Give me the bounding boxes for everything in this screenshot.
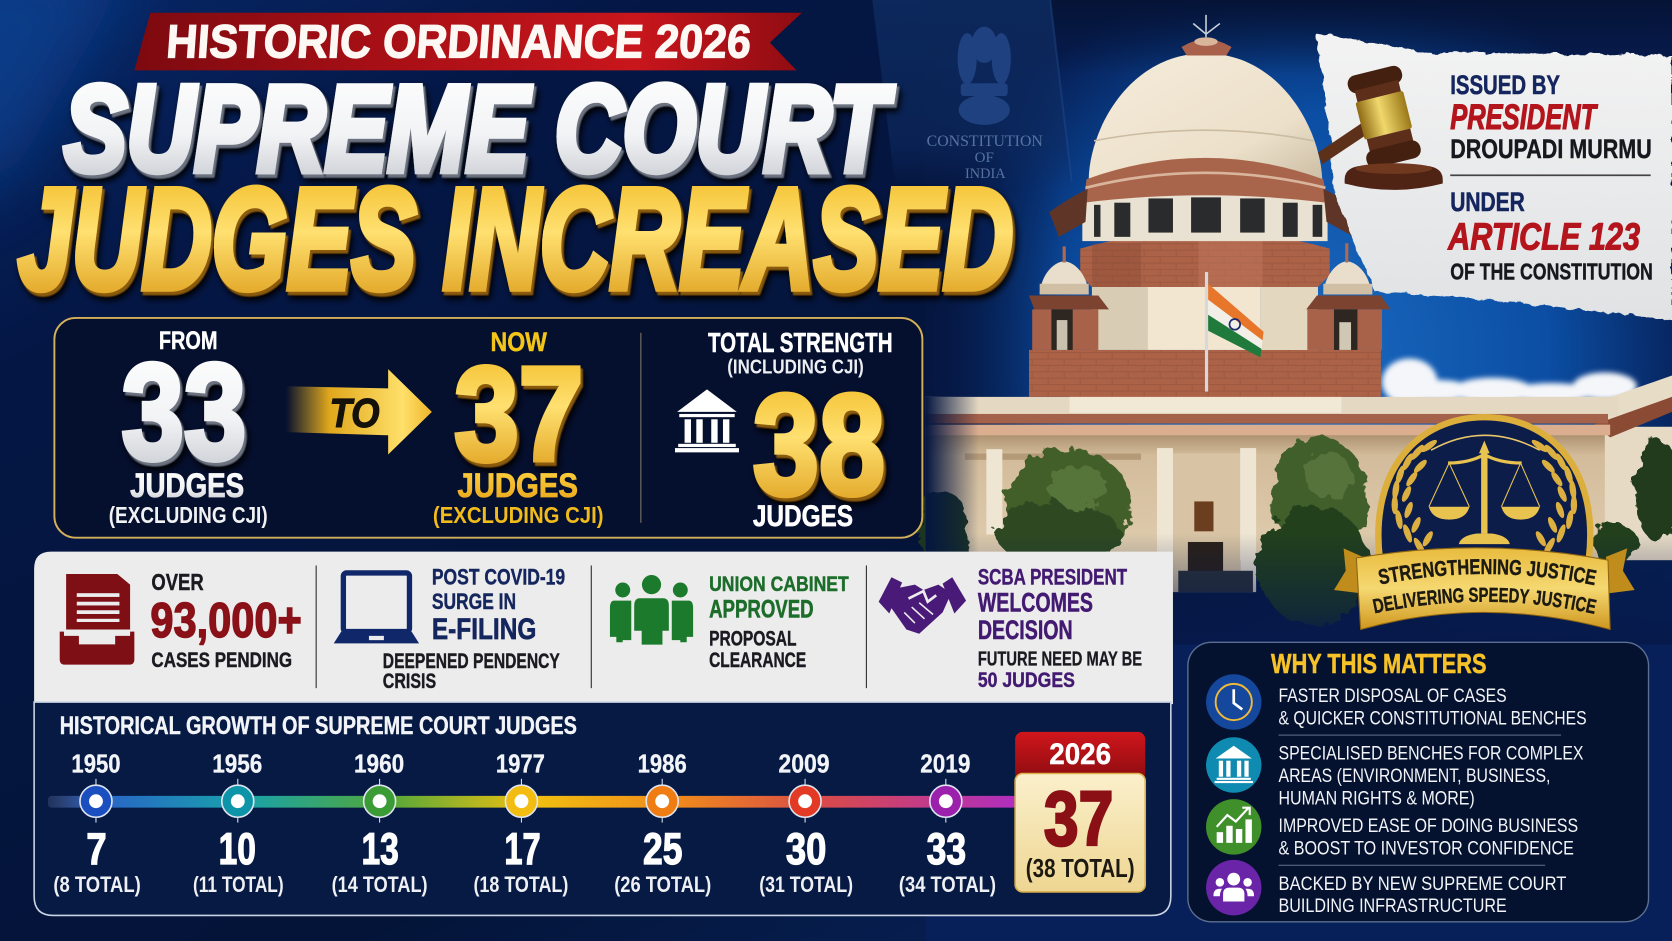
milestone 1986: 25 — [643, 824, 682, 874]
now 37 — [433, 327, 604, 528]
milestone 2026 highlight: (38 TOTAL) — [1026, 855, 1135, 883]
now 37: JUDGES — [457, 467, 578, 505]
panel: judge count — [54, 318, 922, 538]
from 33: 33 — [122, 335, 246, 488]
laurel wreath — [1391, 438, 1577, 556]
milestone 1956 — [193, 750, 284, 897]
headline banner: HISTORIC ORDINANCE 2026 — [165, 15, 753, 68]
torn paper note — [1316, 33, 1672, 320]
left small dome — [1040, 246, 1089, 294]
milestone 1950: (8 TOTAL) — [53, 872, 141, 897]
ribbon: DELIVERING SPEEDY JUSTICE — [1372, 587, 1597, 614]
icon: handshake — [879, 577, 966, 634]
fact: cabinet: APPROVED — [709, 597, 814, 624]
cream tower — [1092, 280, 1147, 350]
note text: ISSUED BY — [1450, 70, 1560, 100]
milestone 1977: (18 TOTAL) — [473, 872, 568, 897]
total strength — [675, 327, 893, 533]
milestone 1950 — [53, 750, 141, 897]
icon: people — [610, 575, 693, 645]
milestone 1977: 1977 — [496, 750, 545, 778]
item: new building: BUILDING INFRASTRUCTURE — [1279, 896, 1507, 917]
supreme court building — [918, 15, 1672, 648]
icon: courthouse — [675, 389, 739, 452]
fact: e-filing: POST COVID-19 — [432, 565, 565, 590]
roof bands — [926, 397, 1619, 416]
total strength: 38 — [753, 366, 885, 525]
right small dome — [1323, 243, 1372, 294]
book title: INDIA — [965, 166, 1006, 182]
from 33: FROM — [159, 328, 218, 355]
panel: key facts — [34, 552, 1173, 704]
fact: cases pending: 93,000+ — [150, 594, 302, 648]
icon: growth chart — [1206, 799, 1261, 855]
scales of justice — [1429, 441, 1540, 544]
total strength: JUDGES — [753, 500, 853, 533]
lower building wall — [926, 432, 1672, 560]
panel: why this matters — [1188, 642, 1649, 922]
fact: scba: DECISION — [978, 615, 1073, 645]
fact: scba: SCBA PRESIDENT — [978, 565, 1127, 590]
item: specialised benches: AREAS (ENVIRONMENT, BUSINESS, — [1279, 766, 1550, 787]
milestone 1956: 1956 — [212, 750, 262, 778]
milestone 2026 highlight — [1015, 732, 1145, 892]
ribbon — [1334, 547, 1635, 630]
milestone 2009: 2009 — [778, 750, 830, 778]
timeline heading: HISTORICAL GROWTH OF SUPREME COURT JUDGES — [60, 713, 577, 740]
title: judges increased: JUDGES INCREASED — [18, 160, 1013, 319]
brick drum — [1080, 231, 1330, 287]
arrow — [286, 369, 432, 454]
fact: scba: 50 JUDGES — [978, 668, 1075, 692]
base of tower — [1029, 350, 1381, 397]
milestone 2009: (31 TOTAL) — [759, 872, 853, 897]
item: faster disposal: FASTER DISPOSAL OF CASES — [1279, 686, 1507, 707]
fact: cases pending — [60, 569, 302, 672]
dome band — [1083, 158, 1328, 203]
gavel — [1318, 64, 1443, 190]
milestone 2019 — [899, 750, 996, 897]
book title: OF — [975, 150, 994, 166]
fact: cabinet: PROPOSAL — [709, 626, 797, 650]
item: faster disposal: & QUICKER CONSTITUTIONAL BENCHES — [1279, 708, 1587, 729]
ribbon: STRENGTHENING JUSTICE — [1378, 559, 1597, 586]
milestone 1950: 7 — [86, 824, 107, 874]
book title: CONSTITUTION — [927, 133, 1043, 150]
milestone 1956: (11 TOTAL) — [193, 872, 284, 897]
emblem — [958, 27, 1011, 125]
milestone 1960 — [332, 750, 428, 897]
item: new building — [1206, 860, 1567, 917]
timeline bar — [48, 796, 1016, 808]
milestone 1956: 10 — [219, 824, 256, 874]
clouds — [1382, 358, 1637, 405]
item: specialised benches: SPECIALISED BENCHES FOR COMPLEX — [1279, 744, 1584, 765]
now 37: NOW — [491, 327, 548, 357]
milestone 1960: 1960 — [354, 750, 404, 778]
fact: scba: FUTURE NEED MAY BE — [978, 649, 1142, 671]
arrow: TO — [329, 390, 380, 436]
title: supreme court: SUPREME COURT — [64, 61, 894, 197]
right pavilion — [1306, 296, 1390, 350]
item: specialised benches: HUMAN RIGHTS & MORE) — [1279, 788, 1475, 809]
why heading: WHY THIS MATTERS — [1271, 648, 1486, 679]
fact: e-filing: E-FILING — [432, 613, 536, 646]
item: new building: BACKED BY NEW SUPREME COURT — [1279, 874, 1567, 895]
fact: e-filing: DEEPENED PENDENCY — [383, 649, 560, 673]
icon: group — [1206, 860, 1261, 915]
now 37: 37 — [454, 340, 583, 489]
fact: cases pending: OVER — [151, 569, 204, 595]
fact: cabinet: UNION CABINET — [709, 572, 849, 596]
fact: cases pending: CASES PENDING — [151, 648, 292, 672]
fact: cabinet: CLEARANCE — [709, 648, 806, 672]
milestone 2019: 2019 — [920, 750, 970, 778]
milestone 1960: (14 TOTAL) — [332, 872, 428, 897]
book title — [927, 133, 1043, 182]
drum windows — [1082, 192, 1328, 241]
milestone 2009 — [759, 750, 853, 897]
icon: clock — [1206, 674, 1261, 730]
from 33: JUDGES — [130, 467, 244, 505]
fact: e-filing: CRISIS — [383, 669, 436, 693]
milestone 1986 — [614, 750, 711, 897]
fact: scba — [879, 565, 1142, 692]
item: ease of business — [1206, 799, 1578, 860]
dome — [1089, 53, 1322, 179]
flag — [1205, 272, 1264, 392]
milestone 2009: 30 — [786, 824, 826, 874]
eaves — [1049, 189, 1364, 237]
justice badge — [1334, 414, 1635, 630]
milestone 2019: 33 — [927, 824, 966, 874]
ground fade — [926, 533, 1672, 645]
item: ease of business: IMPROVED EASE OF DOING BUSINESS — [1279, 816, 1578, 837]
note text: UNDER — [1450, 187, 1525, 217]
fact: e-filing: SURGE IN — [432, 589, 516, 614]
panel: historical timeline — [34, 702, 1171, 915]
item: specialised benches — [1206, 737, 1584, 809]
trees — [918, 437, 1672, 625]
milestone 1950: 1950 — [71, 750, 120, 778]
milestone 1977: 17 — [504, 824, 541, 874]
item: ease of business: & BOOST TO INVESTOR CONFIDENCE — [1279, 839, 1574, 860]
item: faster disposal — [1206, 674, 1587, 730]
fact: e-filing — [334, 565, 565, 693]
now 37: (EXCLUDING CJI) — [433, 502, 604, 528]
icon: bank — [1206, 737, 1261, 793]
milestone 2019: (34 TOTAL) — [899, 872, 996, 897]
from 33 — [109, 328, 268, 528]
milestone 1977 — [473, 750, 568, 897]
dome cap — [1181, 15, 1232, 55]
milestone 2026 highlight: 2026 — [1049, 738, 1111, 771]
icon: file tray — [60, 574, 134, 665]
milestone 2026 highlight: 37 — [1044, 776, 1113, 862]
fact: scba: WELCOMES — [978, 587, 1093, 617]
milestone 1986: (26 TOTAL) — [614, 872, 711, 897]
left pavilion — [1029, 296, 1109, 350]
milestone 1960: 13 — [361, 824, 399, 874]
total strength: TOTAL STRENGTH — [708, 327, 893, 358]
total strength: (INCLUDING CJI) — [727, 356, 864, 378]
milestone 1986: 1986 — [638, 750, 687, 778]
note text — [1447, 70, 1653, 285]
from 33: (EXCLUDING CJI) — [109, 502, 268, 528]
icon: laptop — [334, 573, 419, 643]
constitution book — [872, 0, 1073, 190]
fact: cabinet — [610, 572, 849, 672]
note text: PRESIDENT — [1450, 98, 1598, 137]
columns — [986, 448, 1256, 592]
